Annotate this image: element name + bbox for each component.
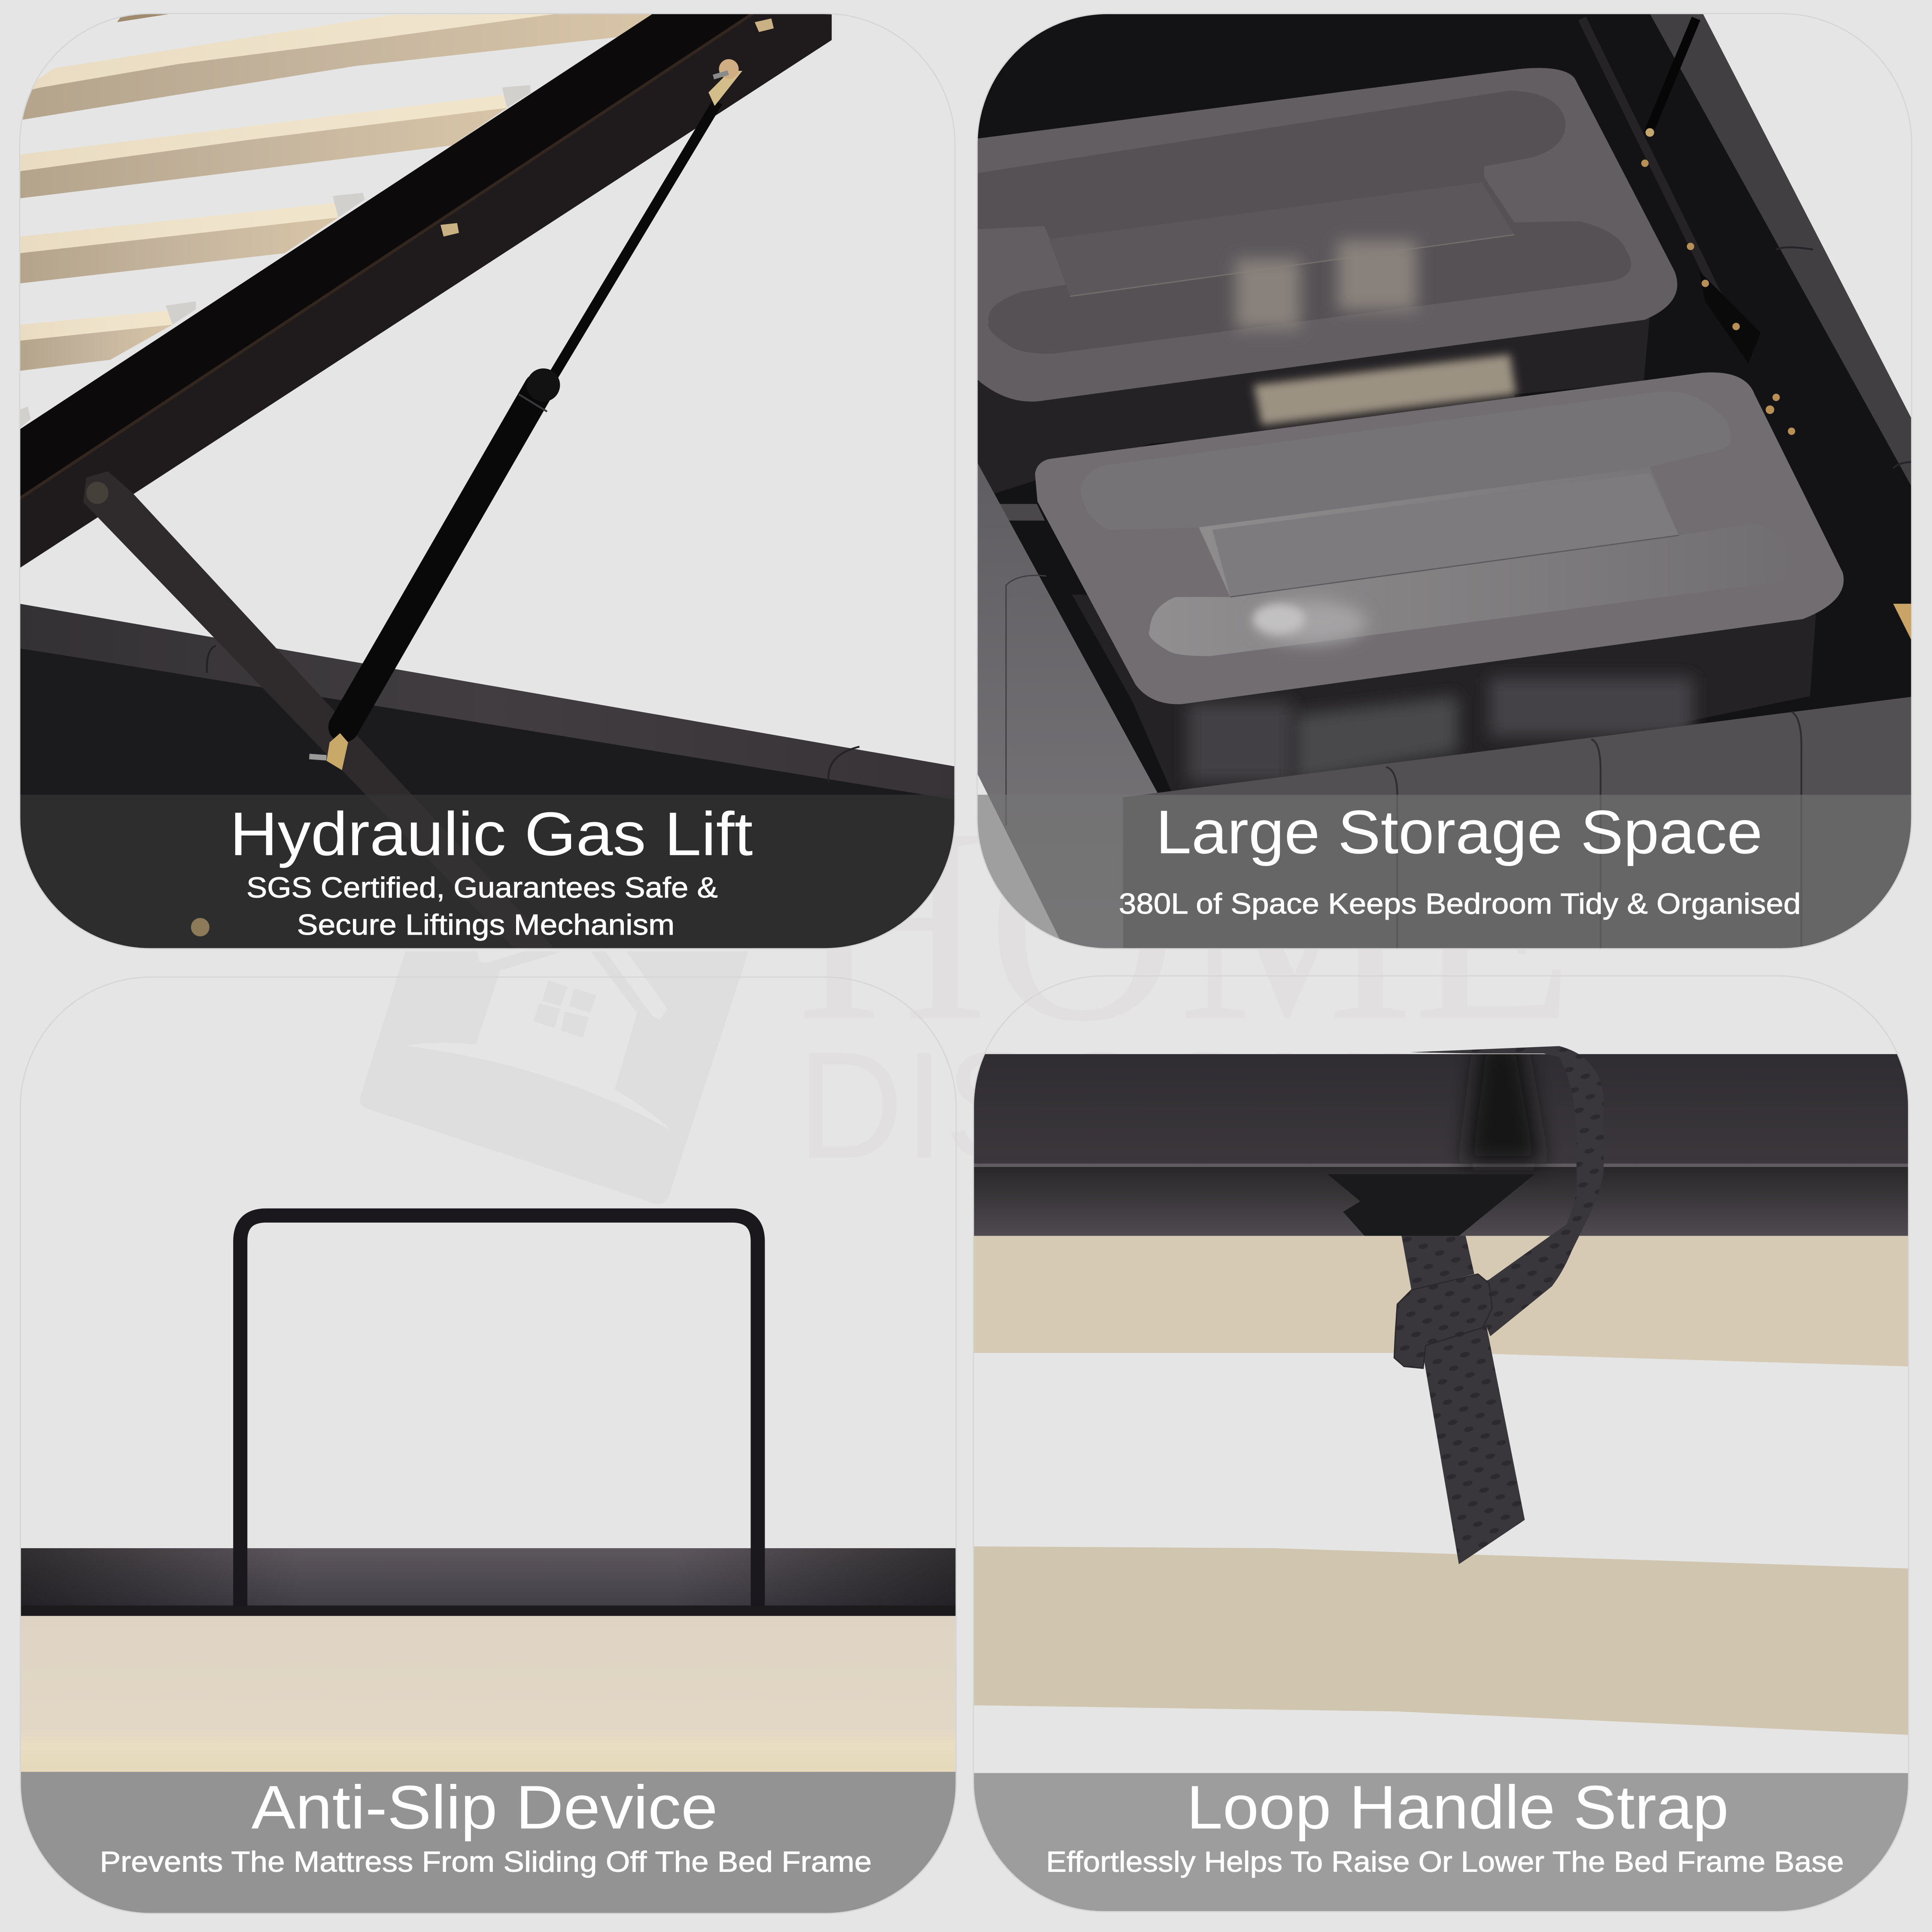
watermark: brand name: HOME [797, 770, 1574, 1079]
right side rail [1650, 14, 1912, 487]
subtitle: Effortlessly Helps To Raise Or Lower The Bed Frame Base [1046, 1846, 1844, 1878]
caption band [973, 1773, 1908, 1912]
panel: anti-slip device [20, 977, 956, 1914]
wooden slats [973, 1236, 1908, 1735]
front rail [1123, 697, 1912, 949]
watermark: brand name: DISCOUNT [797, 1021, 1570, 1191]
lid frame beam [20, 14, 832, 568]
caption band [20, 1772, 956, 1914]
interior of bed box [977, 14, 1912, 949]
gas strut [309, 59, 742, 770]
strap [1394, 1046, 1604, 1564]
subtitle: SGS Certified, Guarantees Safe & [246, 872, 718, 904]
title: Hydraulic Gas Lift [230, 800, 753, 869]
panel: hydraulic gas lift [20, 14, 955, 949]
background beyond rail [1703, 14, 1912, 419]
base side rail [20, 604, 955, 949]
subtitle: Secure Liftings Mechanism [297, 909, 674, 941]
near left rail [977, 462, 1158, 949]
wire retainer [240, 1215, 758, 1607]
watermark: house logo [360, 951, 749, 1204]
storage box 1 [977, 68, 1677, 499]
black frame bar [20, 1548, 956, 1616]
strut and hinge hardware [1582, 18, 1912, 641]
title: Large Storage Space [1156, 798, 1762, 866]
ledge under box 1 [977, 504, 1045, 521]
wooden slats [20, 14, 653, 428]
base bolt [191, 918, 210, 936]
title: Anti-Slip Device [251, 1773, 718, 1842]
wooden slat [20, 1616, 956, 1772]
caption band [977, 795, 1912, 949]
panel: large storage space [977, 14, 1912, 949]
dark frame beam [973, 1054, 1908, 1236]
caption band [20, 795, 955, 949]
panel: loop handle strap [973, 976, 1908, 1912]
support arm with pivot bolt [83, 471, 554, 949]
strap shadow on beam [1327, 1040, 1542, 1236]
subtitle: Prevents The Mattress From Sliding Off The Bed Frame [100, 1846, 872, 1878]
title: Loop Handle Strap [1187, 1773, 1728, 1842]
subtitle [246, 872, 718, 941]
subtitle: 380L of Space Keeps Bedroom Tidy & Organised [1119, 888, 1801, 920]
storage box 2 [1035, 372, 1844, 801]
